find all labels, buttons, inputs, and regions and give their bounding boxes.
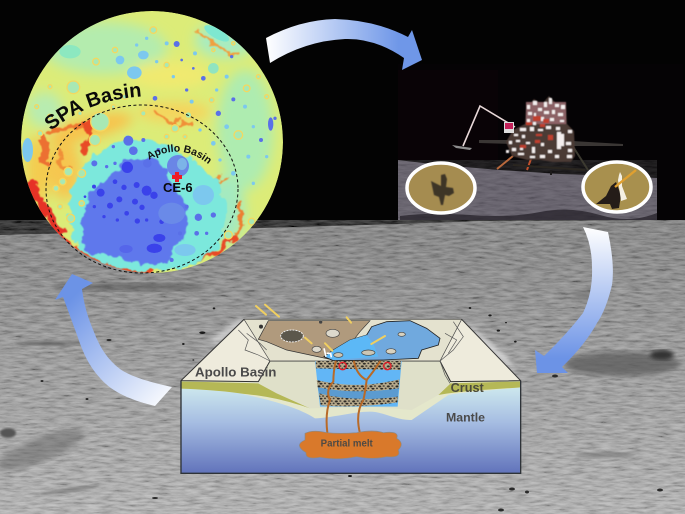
outer outline of section — [181, 381, 521, 473]
Apollo basin label: Apollo Basin — [148, 144, 211, 164]
blue mare basalt — [324, 321, 440, 361]
mantle layer — [181, 381, 521, 473]
black sky background — [0, 0, 685, 240]
crust layer — [181, 381, 521, 420]
lunar far side topographic globe — [21, 11, 283, 274]
magma conduits — [327, 362, 380, 433]
brown regolith terrain — [258, 321, 370, 360]
arrow: lander to cross-section — [535, 227, 613, 373]
sample site markers — [339, 362, 391, 370]
SPA basin dashed outline — [46, 105, 238, 273]
label: Apollo Basin: Apollo Basin — [195, 365, 276, 380]
red high-elevation rim — [33, 30, 242, 274]
photo: Chang'e-6 lander on the lunar surface — [398, 64, 683, 220]
bright mare — [325, 335, 378, 360]
meteor impacts — [256, 305, 385, 351]
basin wall — [258, 361, 451, 410]
layered crater column — [315, 361, 402, 407]
craters — [22, 22, 277, 262]
label: Mantle: Mantle — [446, 410, 485, 424]
cyan basin halo — [68, 136, 227, 271]
inset photo: sampling footprint — [407, 163, 475, 213]
white mission glyph — [324, 348, 331, 357]
blue basin floor — [83, 160, 187, 264]
label: Crust: Crust — [451, 381, 484, 395]
arrow: globe to lander — [266, 19, 422, 70]
basin floor — [244, 319, 462, 361]
arrow: cross-section back to globe — [55, 274, 172, 406]
ejecta halo and debris — [182, 307, 517, 477]
SPA basin label: SPA Basin — [45, 84, 141, 129]
lander legs — [497, 142, 588, 175]
label: Partial melt: Partial melt — [321, 439, 374, 450]
CE-6 label: CE-6 — [163, 180, 193, 195]
top surface outer rim — [181, 319, 521, 382]
CE-6 landing site marker — [172, 172, 182, 182]
partial melt body — [299, 431, 401, 459]
lunar ground photograph — [0, 220, 685, 514]
flag — [504, 122, 514, 133]
Apollo crater — [167, 155, 189, 177]
geological cross-section of Apollo basin — [181, 305, 521, 477]
terrain pits — [259, 320, 405, 357]
elevation colour patches — [26, 22, 273, 244]
robotic sampling arm — [452, 106, 515, 150]
rim cracks — [238, 322, 463, 383]
lander body — [506, 96, 575, 162]
solar panels — [479, 140, 623, 146]
inset photo: drill and shadow — [583, 162, 651, 212]
